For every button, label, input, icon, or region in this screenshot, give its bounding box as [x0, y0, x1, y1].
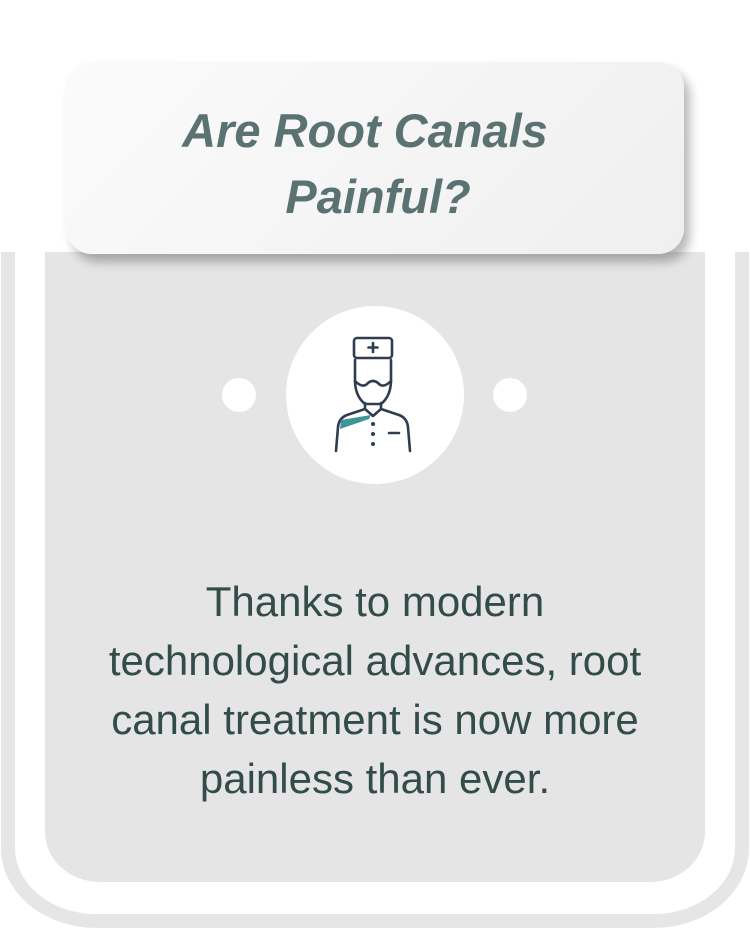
- title: [181, 104, 548, 223]
- body text: technological advances, root: [109, 637, 641, 684]
- title: Are Root Canals: [182, 104, 548, 157]
- right dot: [493, 378, 527, 412]
- body text: painless than ever.: [200, 755, 550, 802]
- body text: Thanks to modern: [206, 578, 544, 625]
- body text: [109, 578, 641, 802]
- body text: canal treatment is now more: [111, 696, 639, 743]
- title: Painful?: [285, 170, 471, 223]
- icon: doctor in circle: [286, 306, 464, 484]
- left dot: [222, 378, 256, 412]
- outer frame: [1, 252, 749, 928]
- inner panel: [45, 252, 705, 882]
- title card: [66, 62, 684, 254]
